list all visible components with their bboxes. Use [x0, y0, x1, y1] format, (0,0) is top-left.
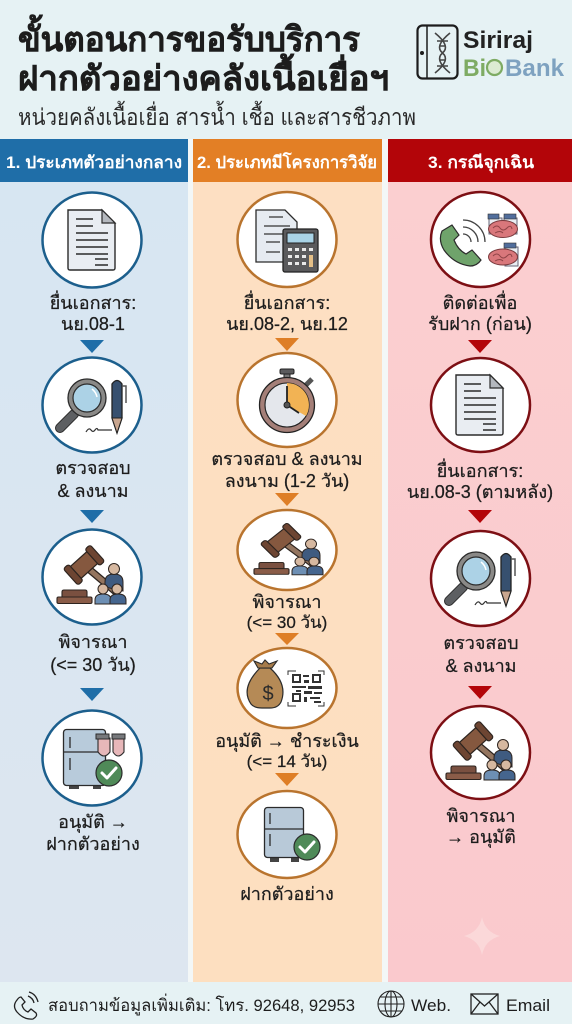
step text: contact first: ติดต่อเพื่อ: [443, 290, 517, 313]
step text: check and sign: & ลงนาม: [445, 656, 517, 676]
step text: review: (<= 30 วัน): [247, 613, 327, 632]
step text: review: พิจารณา: [252, 592, 322, 612]
icon: envelope: [471, 994, 498, 1014]
step text: approve and pay: (<= 14 วัน): [247, 752, 327, 771]
heading: column 3: 3. กรณีจุกเฉิน: [428, 152, 534, 173]
step text: contact first: รับฝาก (ก่อน): [428, 314, 532, 334]
step text: review: [247, 592, 327, 632]
heading: column 3: [388, 139, 572, 182]
icon: magnifier and pen: [431, 531, 530, 626]
sparkle mark: [464, 917, 500, 955]
arrow: [80, 510, 104, 523]
logo: Siriraj BioBank: Siriraj: [463, 27, 533, 54]
icon: freezer with tubes: [42, 710, 142, 806]
step text: review and approve: พิจารณา: [446, 806, 516, 826]
step text: check and sign 1-2 days: ตรวจสอบ & ลงนาม: [211, 449, 363, 469]
panel: column 1 background: [0, 182, 188, 982]
icon: document: [42, 192, 142, 288]
logo: Siriraj BioBank: [418, 26, 565, 82]
step text: submit document: [407, 458, 553, 502]
arrow: [275, 773, 299, 786]
email label: Email: [506, 996, 550, 1015]
icon: magnifier and pen: [42, 358, 142, 452]
logo: Siriraj BioBank: Bi: [463, 55, 486, 82]
step text: review and approve: → อนุมัติ: [446, 827, 516, 848]
arrow: [468, 686, 492, 699]
panel: column 3 background: [388, 182, 572, 982]
arrow: [80, 688, 104, 701]
footer: [14, 991, 550, 1019]
title: [18, 14, 389, 98]
step text: review: พิจารณา: [58, 632, 128, 652]
step text: submit document: ยื่นเอกสาร:: [50, 290, 136, 313]
step text: submit document: นย.08-3 (ตามหลัง): [407, 482, 553, 502]
step text: approve and deposit: ฝากตัวอย่าง: [46, 834, 140, 854]
column 3 steps: [407, 192, 553, 848]
icon: checklist and calculator: [238, 192, 336, 287]
step text: submit document: นย.08-1: [61, 314, 125, 334]
step text: approve and pay: อนุมัติ → ชำระเงิน: [215, 731, 359, 752]
column 2 steps: [211, 192, 363, 904]
step text: check and sign: & ลงนาม: [57, 481, 129, 501]
step text: check and sign: [443, 633, 519, 676]
icon: stopwatch: [238, 353, 336, 447]
arrow: [275, 338, 299, 351]
step text: submit documents: ยื่นเอกสาร:: [244, 290, 330, 313]
step text: submit document: ยื่นเอกสาร:: [437, 458, 523, 481]
arrow: [468, 510, 492, 523]
heading: column 1: 1. ประเภทตัวอย่างกลาง: [6, 153, 182, 172]
step text: check and sign 1-2 days: ลงนาม (1-2 วัน): [225, 471, 349, 491]
contact text: สอบถามข้อมูลเพิ่มเติม: โทร. 92648, 92953: [48, 993, 355, 1016]
step text: review and approve: [446, 806, 516, 848]
subtitle: หน่วยคลังเนื้อเยื่อ สารน้ำ เชื้อ และสารชีวภาพ: [18, 101, 416, 130]
panel: column 2 background: [193, 182, 382, 982]
arrow: [275, 493, 299, 506]
step text: check and sign: [55, 458, 131, 501]
arrow: [80, 340, 104, 353]
step text: contact first: [428, 290, 532, 334]
web label: Web.: [411, 996, 451, 1015]
icon: gavel: [431, 706, 530, 799]
icon: gavel: [42, 530, 142, 624]
heading: column 2: [193, 139, 382, 182]
icon: phone and specimen jars: [431, 192, 530, 287]
step text: approve and deposit: [46, 812, 140, 854]
heading: column 1: [0, 139, 188, 182]
step text: approve and deposit: อนุมัติ →: [58, 812, 128, 833]
icon: money bag and QR code: $: [262, 683, 274, 705]
column 1 steps: [42, 192, 142, 854]
step text: approve and pay: [215, 731, 359, 771]
heading: column 2: 2. ประเภทมีโครงการวิจัย: [197, 152, 377, 172]
title: ขั้นตอนการขอรับบริการ: [18, 14, 361, 59]
arrow: [468, 340, 492, 353]
step text: submit document: [50, 290, 136, 334]
icon: phone: [14, 992, 38, 1019]
step text: deposit: ฝากตัวอย่าง: [240, 884, 334, 904]
step text: submit documents: [226, 290, 348, 334]
step text: review: [50, 632, 136, 675]
icon: globe: [378, 991, 404, 1017]
step text: review: (<= 30 วัน): [50, 655, 136, 675]
step text: check and sign: ตรวจสอบ: [55, 458, 131, 478]
icon: freezer with check: [238, 791, 336, 878]
step text: check and sign: ตรวจสอบ: [443, 633, 519, 653]
step text: submit documents: นย.08-2, นย.12: [226, 314, 348, 334]
step text: check and sign 1-2 days: [211, 449, 363, 491]
icon: money bag and QR code: [238, 648, 336, 728]
logo: Siriraj BioBank: Bank: [505, 55, 565, 82]
title: ฝากตัวอย่างคลังเนื้อเยื่อฯ: [18, 53, 389, 98]
icon: document: [431, 358, 530, 452]
icon: gavel: [238, 510, 336, 590]
arrow: [275, 633, 299, 645]
